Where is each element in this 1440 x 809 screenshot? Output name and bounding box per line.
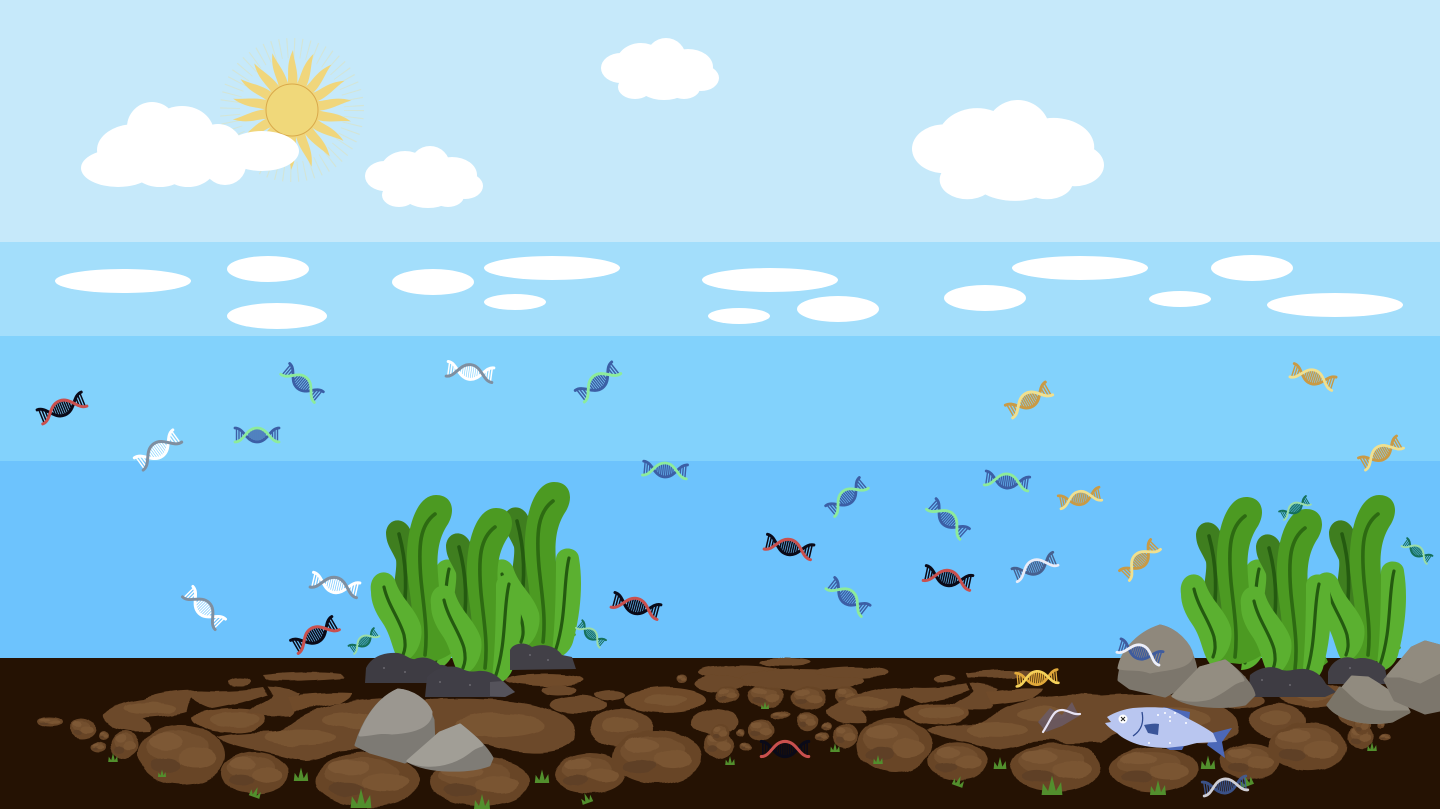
fish dorsal fin xyxy=(1163,707,1190,720)
degraded DNA strand on seabed xyxy=(1038,702,1080,732)
fish eye xyxy=(1118,714,1128,724)
dead fish xyxy=(1105,707,1232,758)
seabed ground xyxy=(0,658,1440,809)
DNA fragment on seabed: red and black xyxy=(761,741,809,757)
grass tufts xyxy=(108,702,1377,809)
cloud: left with sun xyxy=(81,102,299,187)
cloud: small centre-left xyxy=(365,146,483,208)
cloud: large right xyxy=(912,100,1104,201)
seaweed clump right xyxy=(1181,495,1406,685)
icon: DNA helix xyxy=(576,620,606,648)
icon: DNA helix xyxy=(575,362,621,402)
icon: DNA helix xyxy=(642,461,688,479)
grey stones right xyxy=(1119,626,1440,722)
fish spots xyxy=(1148,712,1187,744)
left rock patch on seabed xyxy=(38,672,752,807)
icon: DNA helix xyxy=(1005,382,1053,418)
fish belly fin xyxy=(1166,746,1184,750)
icon: DNA helix xyxy=(1016,670,1058,686)
fish tail xyxy=(1207,728,1232,758)
seaweed clump left xyxy=(371,482,581,685)
icon: DNA helix xyxy=(984,471,1030,491)
icon: DNA helix xyxy=(1119,539,1161,581)
icon: DNA helix xyxy=(281,363,323,403)
grey stones left xyxy=(356,690,492,770)
icon: DNA helix xyxy=(134,430,182,470)
centre rock patch on seabed xyxy=(677,658,888,741)
dark lava rocks left xyxy=(365,643,576,697)
icon: DNA helix xyxy=(446,362,494,382)
DNA fragments in water xyxy=(37,362,1432,686)
icon: DNA helix xyxy=(291,617,339,653)
icon: DNA helix xyxy=(826,578,870,616)
right rock patch on seabed xyxy=(770,670,1391,792)
icon: DNA helix xyxy=(1117,639,1163,665)
icon: sun xyxy=(230,48,354,172)
fish body xyxy=(1105,707,1217,748)
icon: DNA helix xyxy=(1290,364,1336,390)
upper water band xyxy=(0,336,1440,462)
DNA fragment on seabed: white and navy xyxy=(1202,776,1248,796)
icon: DNA helix xyxy=(1358,436,1404,470)
icon: DNA helix xyxy=(235,428,279,442)
lower water band xyxy=(0,461,1440,659)
icon: DNA helix xyxy=(1402,538,1432,564)
dark lava rocks right xyxy=(1248,657,1388,697)
fish pectoral fin xyxy=(1144,724,1159,735)
icon: DNA helix xyxy=(826,477,868,517)
cloud: top centre xyxy=(601,38,719,100)
icon: DNA helix xyxy=(927,499,969,539)
icon: DNA helix xyxy=(1279,496,1311,520)
icon: DNA helix xyxy=(923,566,973,590)
water surface band xyxy=(0,242,1440,337)
icon: DNA helix xyxy=(310,572,360,598)
water surface highlights xyxy=(55,255,1403,329)
fish gill xyxy=(1133,712,1143,736)
icon: DNA helix xyxy=(1058,487,1102,509)
icon: DNA helix xyxy=(182,586,226,630)
icon: DNA helix xyxy=(1012,552,1058,582)
icon: DNA helix xyxy=(764,534,814,560)
icon: DNA helix xyxy=(37,392,87,424)
icon: DNA helix xyxy=(611,593,661,619)
sky band xyxy=(0,0,1440,243)
icon: DNA helix xyxy=(349,628,379,654)
